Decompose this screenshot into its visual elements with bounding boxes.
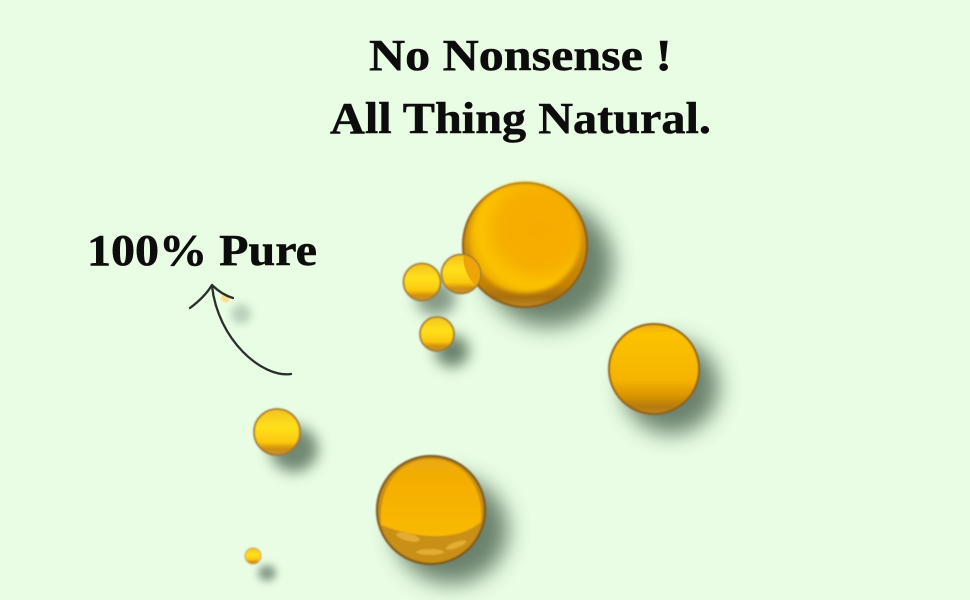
- oil drop: large top: [463, 183, 613, 327]
- title: No Nonsense !: [369, 31, 672, 80]
- title: All Thing Natural.: [330, 94, 711, 143]
- arrow pointing to label: [190, 285, 291, 374]
- oil drop: small overlapping large: [442, 254, 480, 294]
- oil drop: left: [254, 409, 318, 472]
- oil drop: small connected left: [404, 264, 456, 316]
- icon: tiny oil drop with shadow: [221, 294, 251, 324]
- label: 100% Pure: 100% Pure: [87, 226, 317, 275]
- oil drop: small below: [420, 317, 469, 367]
- oil drop: tiny bottom: [245, 548, 276, 581]
- oil drop: right: [609, 324, 719, 434]
- title: [330, 31, 711, 143]
- oil drop: bottom large: [377, 456, 508, 584]
